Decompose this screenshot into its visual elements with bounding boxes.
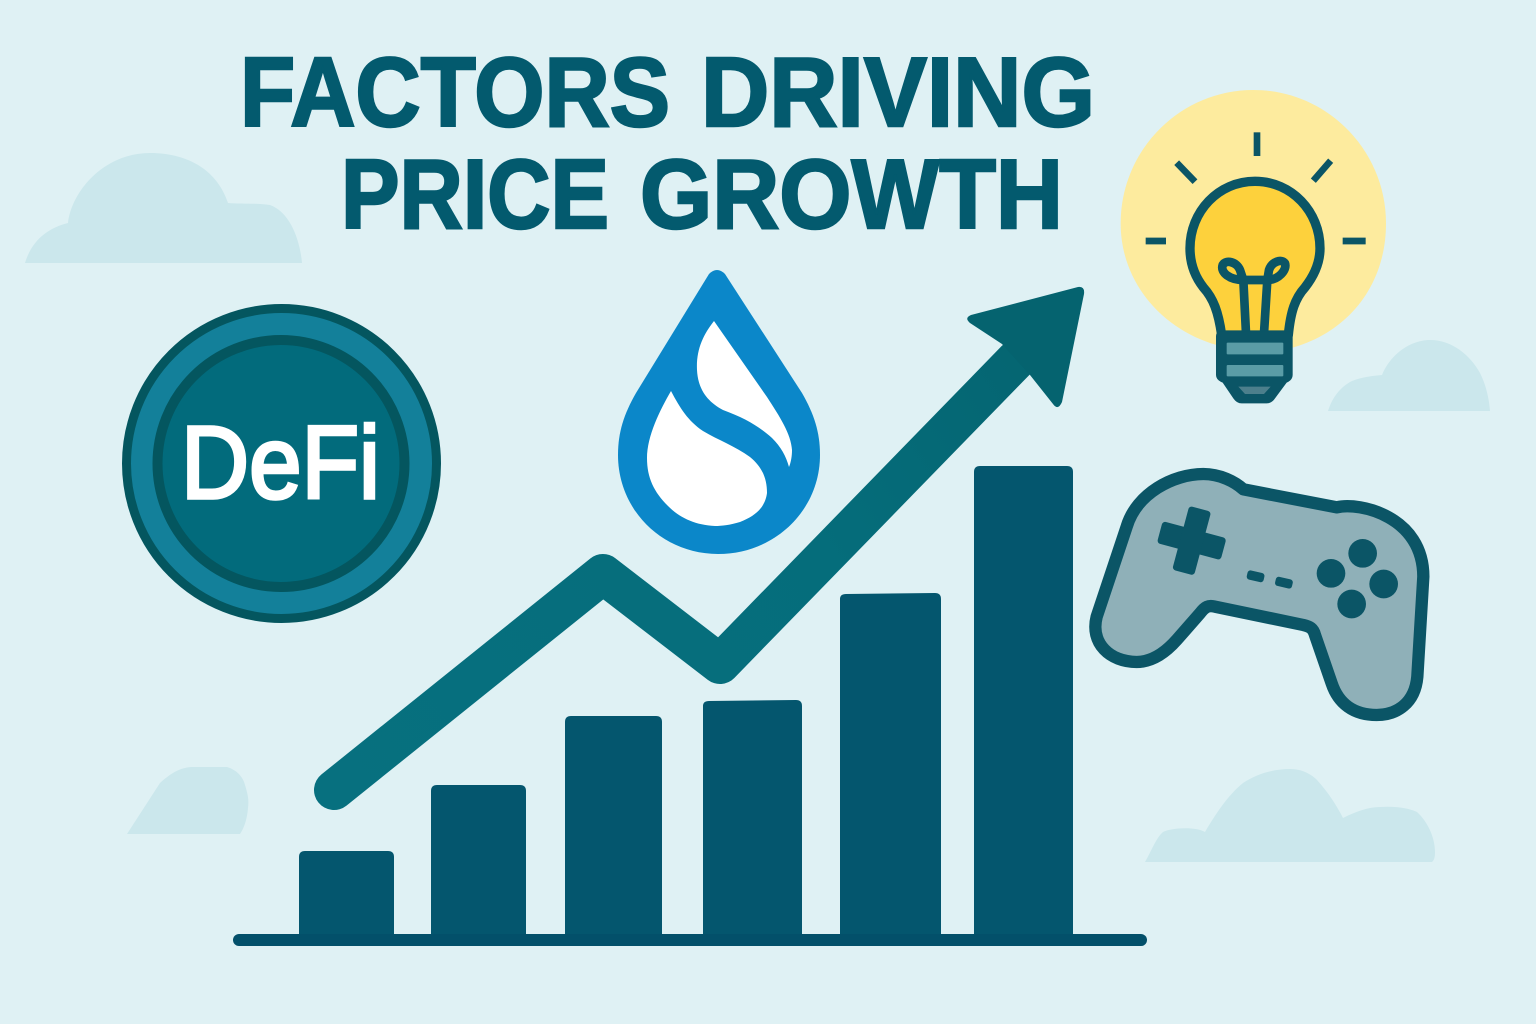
arrow line xyxy=(334,360,1016,790)
title line 1: DRIVING xyxy=(701,37,1095,147)
drop body xyxy=(618,270,820,554)
icon: DeFi coin xyxy=(126,308,436,618)
bar 4 xyxy=(703,700,802,940)
bar 6 xyxy=(974,466,1073,940)
cloud: top left xyxy=(25,153,302,263)
bar 1 xyxy=(299,851,394,940)
coin inner disc xyxy=(158,340,404,587)
title line 1: FACTORS xyxy=(240,37,670,147)
glow circle xyxy=(1121,90,1386,348)
action buttons xyxy=(1317,539,1398,618)
bar chart xyxy=(233,466,1147,946)
select and start buttons xyxy=(1246,570,1293,589)
bulb base xyxy=(1216,332,1293,403)
title xyxy=(240,37,1095,249)
coin outer ring xyxy=(126,308,436,618)
icon: game controller xyxy=(1095,474,1423,715)
title line 2: PRICE xyxy=(341,139,609,249)
bar 3 xyxy=(565,716,662,940)
base stripes xyxy=(1227,343,1283,394)
title line 2 xyxy=(341,139,1063,249)
clouds xyxy=(25,153,1490,862)
d-pad xyxy=(1151,500,1232,581)
coin label: DeFi xyxy=(181,405,380,520)
title line 1 xyxy=(240,37,1095,147)
cloud: small bottom left xyxy=(127,767,248,834)
growth arrow xyxy=(334,287,1084,790)
title line 2: GROWTH xyxy=(640,139,1063,249)
cloud: right of gamepad top xyxy=(1328,340,1490,411)
light rays xyxy=(1146,132,1366,241)
controller body xyxy=(1095,474,1423,715)
drop upper highlight xyxy=(697,321,792,467)
cloud: bottom right xyxy=(1145,769,1435,862)
filament xyxy=(1222,261,1285,333)
arrow head xyxy=(967,287,1084,407)
icon: water drop logo xyxy=(618,270,820,554)
icon: lightbulb xyxy=(1121,90,1386,403)
drop lower highlight xyxy=(647,391,767,526)
chart baseline xyxy=(233,934,1147,946)
bulb glass xyxy=(1190,181,1320,335)
bar 5 xyxy=(840,593,941,940)
bar 2 xyxy=(431,785,526,940)
